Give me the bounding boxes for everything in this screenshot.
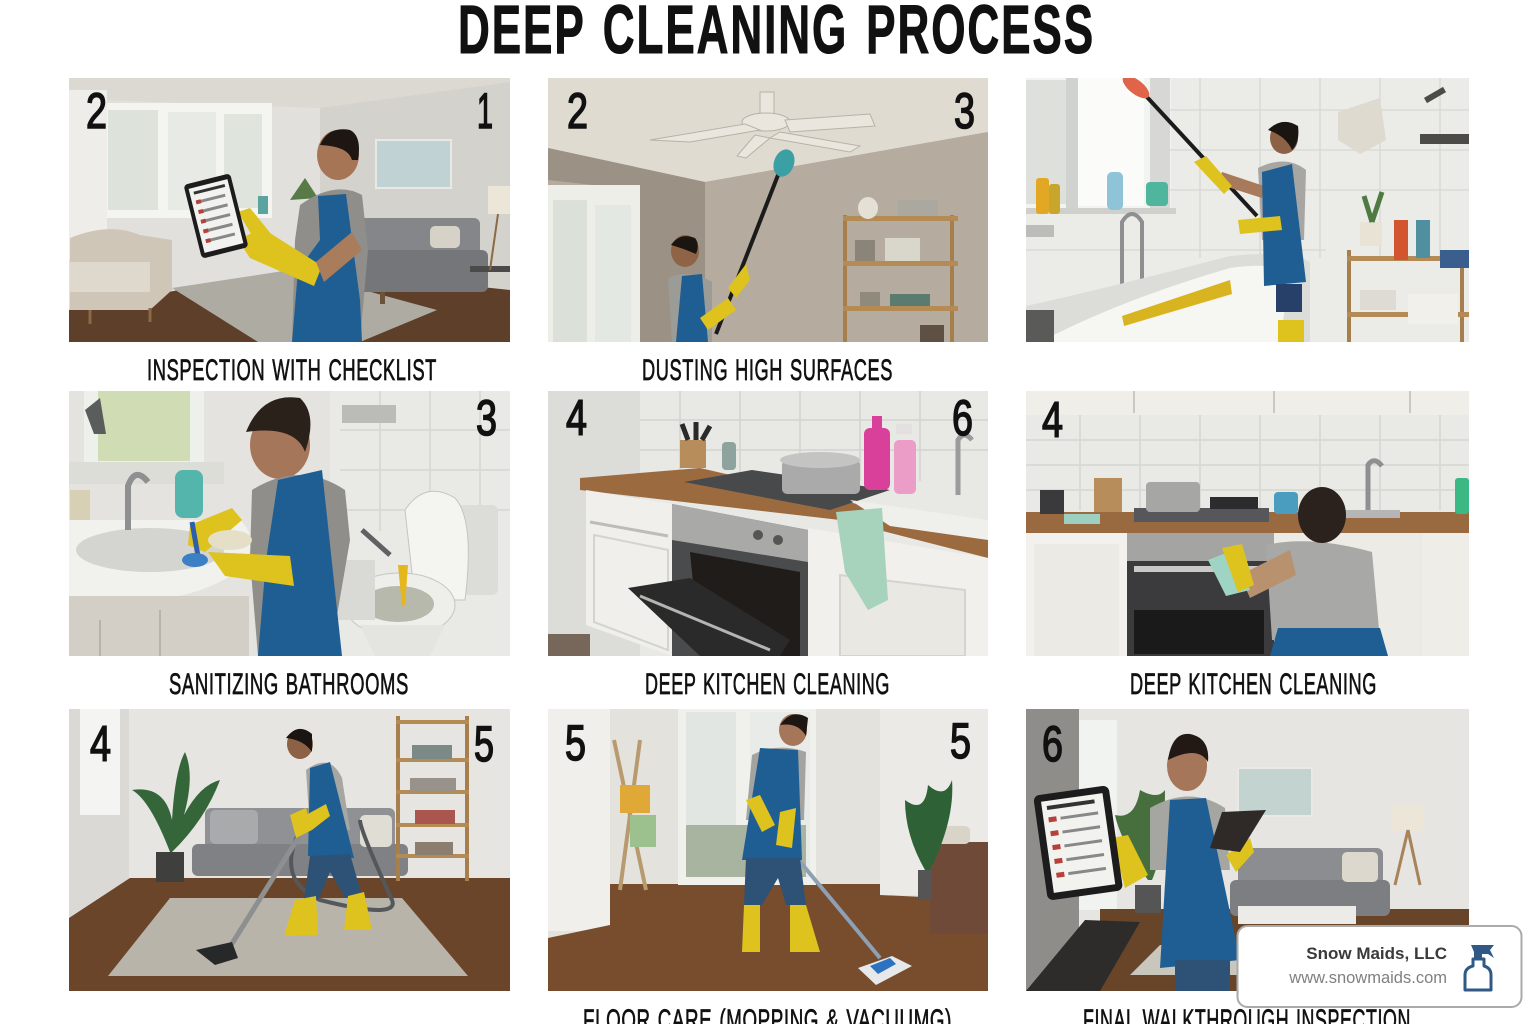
caption: sanitizing bathrooms: SANITIZING BATHROOMS xyxy=(169,668,409,701)
panel: floor care vacuuming: 5 xyxy=(474,716,494,772)
wall hooks and towels xyxy=(1338,98,1386,154)
cabinets xyxy=(586,490,640,644)
oven xyxy=(1127,561,1274,656)
panel: inspection with checklist xyxy=(69,78,510,342)
panel: deep kitchen cleaning oven: 4 xyxy=(566,390,587,446)
shelf xyxy=(843,197,958,342)
panel: floor care mopping: 5 xyxy=(950,713,971,769)
panel: deep kitchen cleaning counter: 4 xyxy=(1042,392,1063,448)
woman xyxy=(1194,122,1306,342)
oven xyxy=(672,504,808,656)
woman xyxy=(668,235,750,342)
panel: final walkthrough inspection: 6 xyxy=(1042,716,1063,772)
checklist tablet xyxy=(184,173,248,259)
panel: deep kitchen cleaning counter xyxy=(1026,391,1469,656)
panel: sanitizing bathrooms xyxy=(69,390,510,656)
armchair xyxy=(70,229,172,310)
scrub brush xyxy=(192,522,198,556)
panel: floor care mopping xyxy=(548,709,988,991)
woman xyxy=(742,714,820,952)
bottles xyxy=(864,428,890,490)
company name: Snow Maids, LLC xyxy=(1306,944,1447,963)
toilet xyxy=(460,505,498,595)
plant xyxy=(1115,790,1165,880)
stove and pot xyxy=(684,470,890,510)
duster xyxy=(1146,96,1257,216)
sofa xyxy=(1238,848,1383,888)
mop xyxy=(782,840,880,958)
shelf with supplies xyxy=(1347,192,1469,342)
woman xyxy=(238,129,368,342)
caption: dusting high surfaces: DUSTING HIGH SURFACES xyxy=(642,354,893,387)
towel xyxy=(836,508,888,610)
brand card: Snow Maids xyxy=(1238,926,1522,1007)
counter and items xyxy=(1026,512,1469,533)
panel: inspection with checklist: 1 xyxy=(477,83,493,139)
panel: floor care vacuuming: 4 xyxy=(90,716,111,772)
panel: inspection with checklist: 2 xyxy=(86,83,107,139)
panel: deep kitchen cleaning oven: 6 xyxy=(952,390,973,446)
panel: bathroom high dusting xyxy=(1026,72,1469,342)
woman xyxy=(1112,734,1266,991)
woman xyxy=(284,729,372,936)
panel: dusting high surfaces: 2 xyxy=(567,83,588,139)
panel: dusting high surfaces xyxy=(548,78,988,342)
caption: inspection with checklist: INSPECTION WITH CHECKLIST xyxy=(147,354,437,387)
towel ladder xyxy=(614,740,646,890)
panel: deep kitchen cleaning oven xyxy=(548,390,988,656)
caption: deep kitchen cleaning, oven: DEEP KITCHEN CLEANING xyxy=(645,668,890,701)
duster xyxy=(716,170,780,334)
panel: final walkthrough inspection xyxy=(1026,709,1469,991)
panel: dusting high surfaces: 3 xyxy=(954,83,975,139)
panel: floor care vacuuming xyxy=(69,709,510,991)
icon: spray bottle xyxy=(1465,945,1494,990)
plant xyxy=(132,752,220,882)
cabinets xyxy=(1026,533,1127,656)
tap and tub xyxy=(1122,214,1142,300)
plant and bottle xyxy=(290,178,318,200)
ceiling fan xyxy=(650,92,875,158)
plant and furniture xyxy=(930,842,988,934)
woman xyxy=(1208,487,1388,656)
counter xyxy=(580,468,988,558)
panel: sanitizing bathrooms: 3 xyxy=(476,390,497,446)
sofa xyxy=(205,808,395,844)
sink xyxy=(69,520,251,603)
shelf xyxy=(396,716,469,881)
checklist tablet xyxy=(1033,785,1123,901)
company website: www.snowmaids.com xyxy=(1288,969,1447,987)
sink and tap xyxy=(850,500,988,540)
sofa xyxy=(364,218,480,250)
caption: deep kitchen cleaning, counter: DEEP KITCHEN CLEANING xyxy=(1130,668,1377,701)
panel: floor care mopping: 5 xyxy=(565,715,586,771)
bottles xyxy=(1036,178,1049,214)
vacuum hose and wand xyxy=(291,820,393,910)
woman xyxy=(188,397,350,656)
